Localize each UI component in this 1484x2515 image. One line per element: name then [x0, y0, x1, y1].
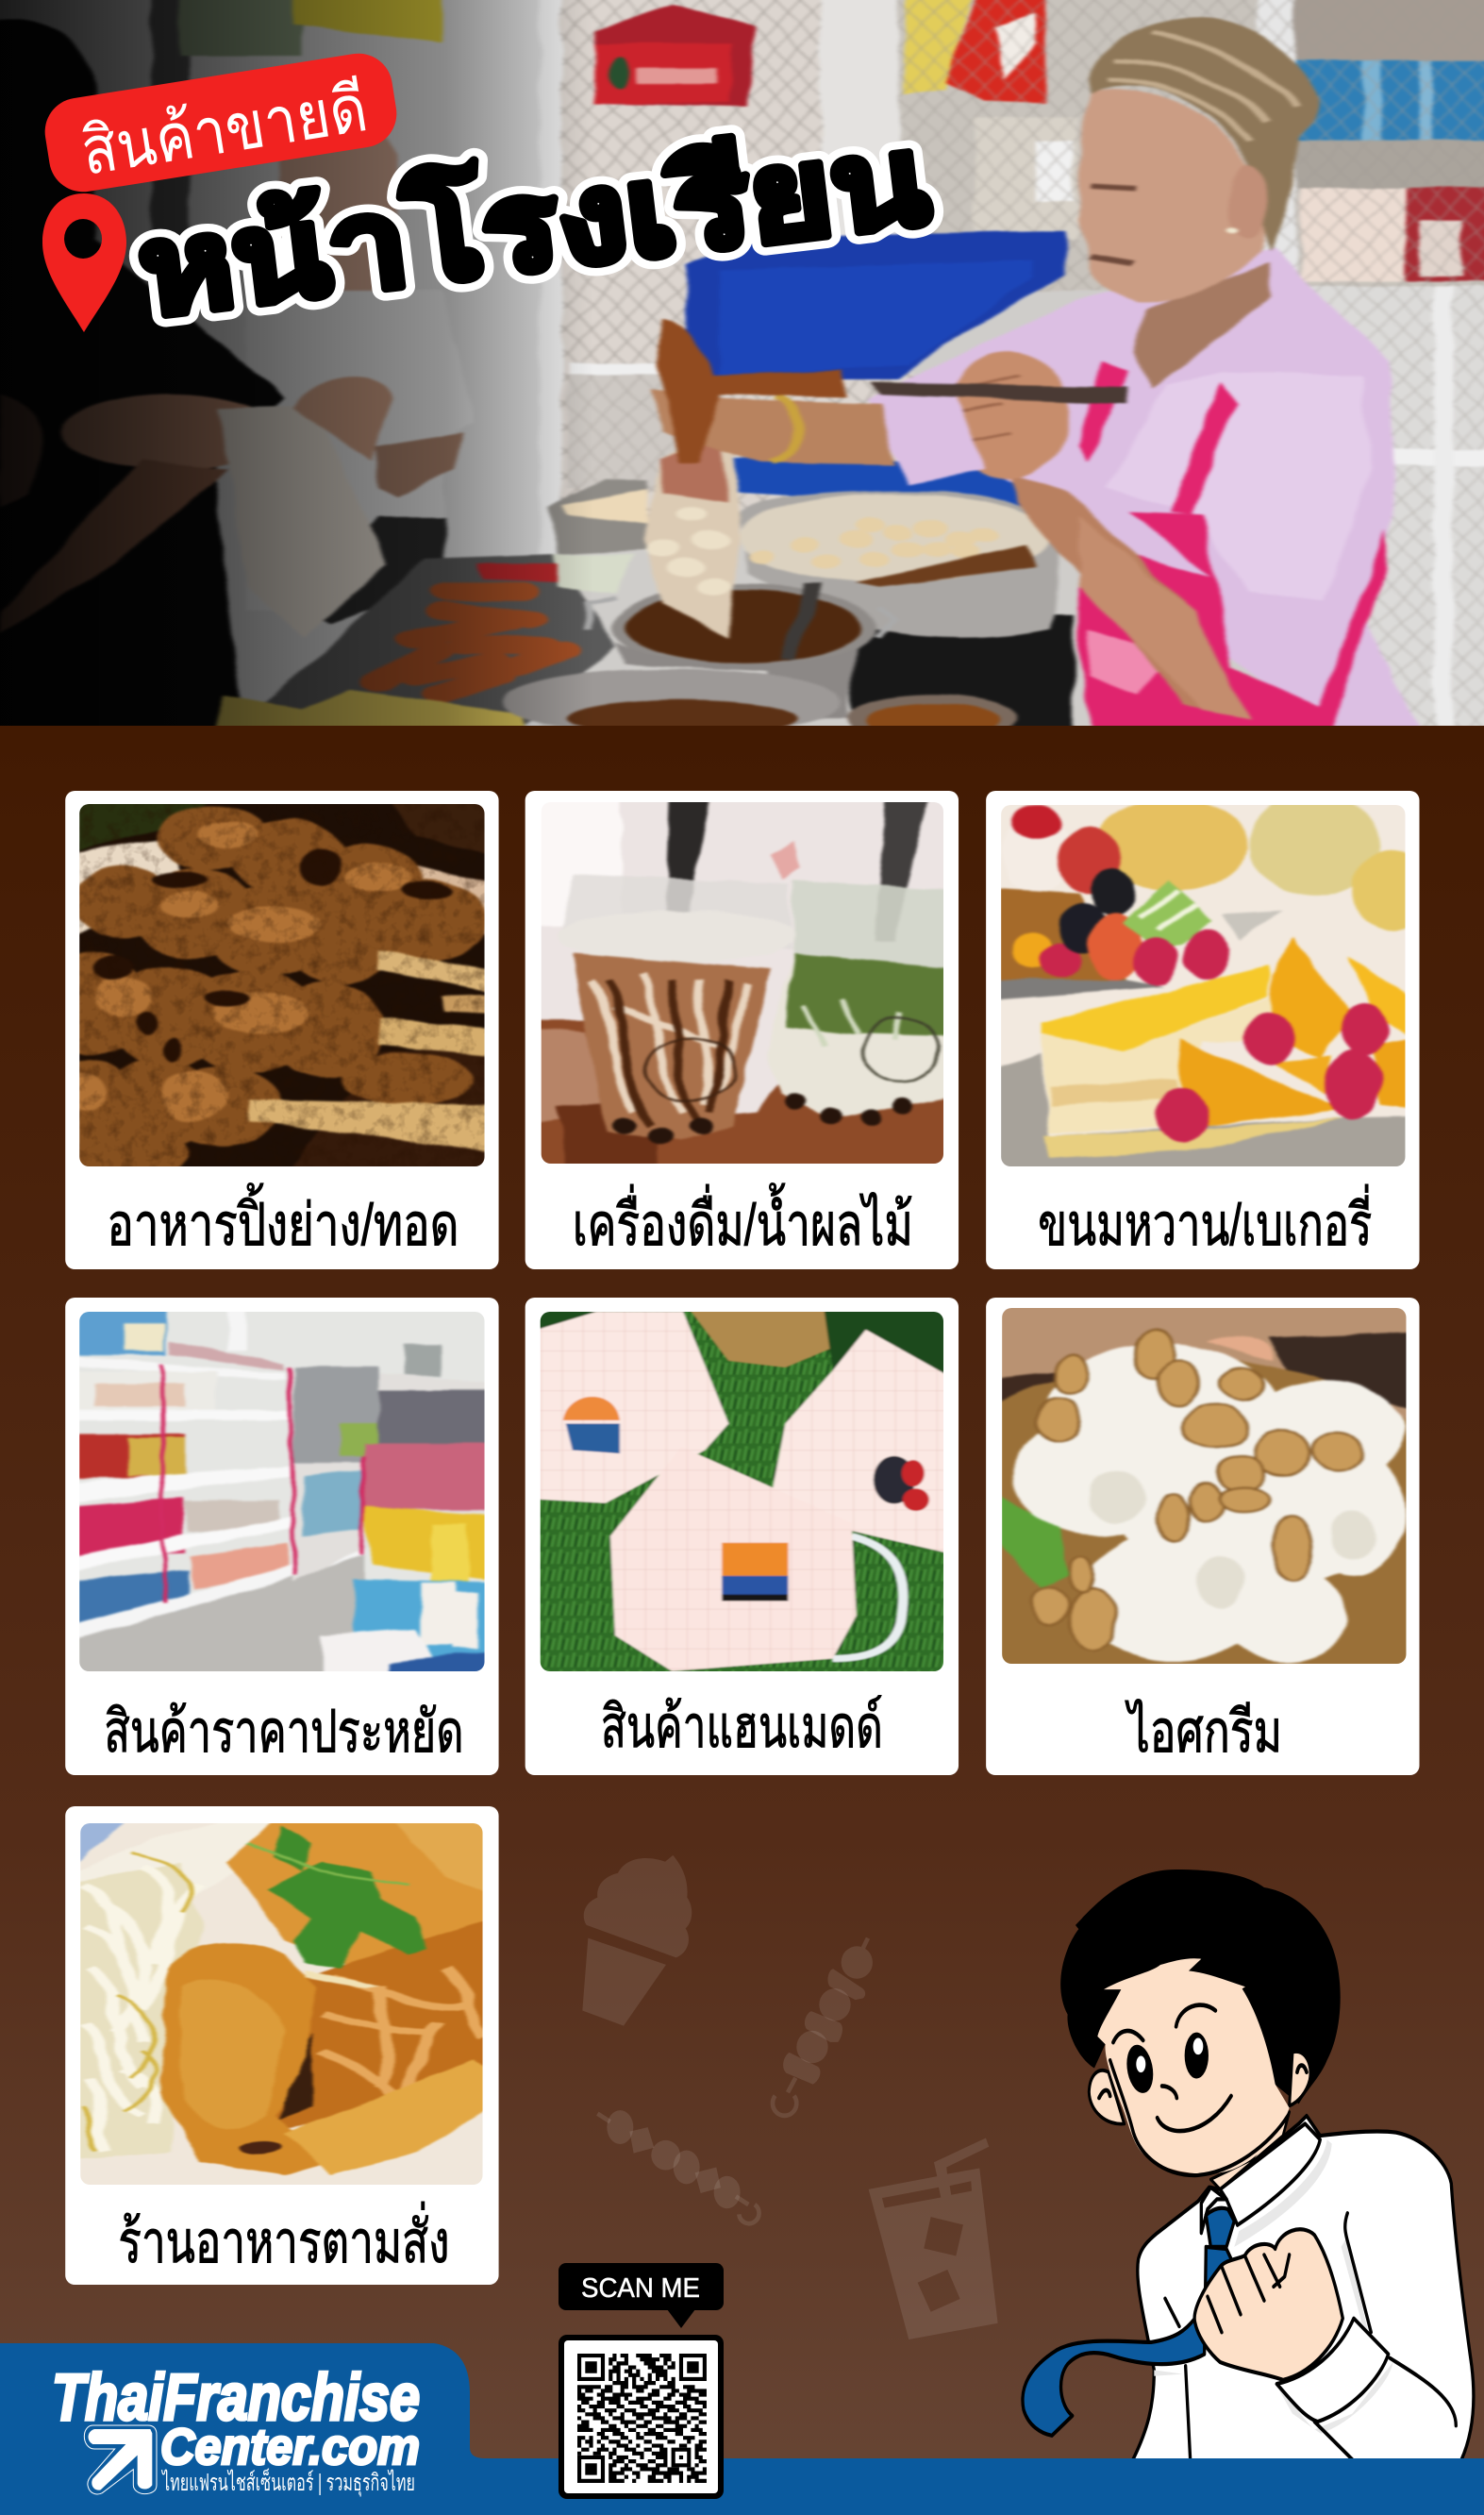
card: drinks — [511, 781, 975, 1269]
photo: pad thai — [38, 1807, 522, 2203]
collar right — [1220, 2123, 1320, 2225]
card: budget goods — [65, 1298, 499, 1775]
mascot: businessman tightening tie — [1023, 1869, 1474, 2461]
logo: ThaiFranchise Center.com: ไทยแฟรนไชส์เซ็นเตอร์ | รวมธุรกิจไทย — [161, 2468, 415, 2497]
tie knot — [1206, 2208, 1234, 2247]
card: handmade goods — [511, 1284, 975, 1775]
hero photo: street vendor at school gate — [0, 0, 1484, 751]
logo: ThaiFranchise Center.com: ThaiFranchise — [52, 2360, 420, 2434]
photo: bubble tea cups — [542, 802, 943, 1164]
collar left — [1201, 2188, 1226, 2233]
icon: skewer vertical — [773, 1938, 873, 2116]
left ear — [1089, 2071, 1125, 2124]
logo: ThaiFranchise Center.com: Center.com — [160, 2419, 420, 2475]
right eye — [1185, 2033, 1209, 2078]
left eye — [1123, 2041, 1158, 2097]
shirt shadows — [1154, 2139, 1393, 2434]
label: ร้านอาหารตามสั่ง — [118, 2202, 449, 2275]
sausage grill — [213, 553, 633, 726]
icon: skewer diagonal — [597, 2110, 759, 2223]
face — [1097, 1958, 1290, 2173]
background icons group — [582, 1855, 998, 2339]
category cards grid — [38, 781, 1439, 2285]
photo: grilled pork skewers — [79, 804, 485, 1166]
title: หน้าโรงเรียน: หน้าโรงเรียน — [132, 107, 935, 342]
ladle and sauce — [656, 319, 1126, 462]
vendor woman — [648, 18, 1429, 751]
blue tub — [568, 231, 1064, 510]
photo: coconut ice cream with peanuts — [1002, 1308, 1406, 1664]
scan me bubble: SCAN ME — [581, 2273, 700, 2304]
label: ขนมหวาน/เบเกอรี่ — [1038, 1184, 1372, 1258]
location pin icon — [42, 193, 126, 332]
card: desserts and bakery — [975, 781, 1439, 1269]
jaw line — [1110, 2060, 1288, 2175]
card: ice cream — [975, 1284, 1439, 1775]
icon: logo arrow — [84, 2425, 157, 2494]
pots and containers — [502, 478, 1074, 751]
footer band with logo panel — [0, 2343, 1484, 2515]
label: ไอศกรีม — [1125, 1699, 1282, 1765]
photo: discount store shelves — [79, 1312, 485, 1671]
label: เครื่องดื่ม/น้ำผลไม้ — [573, 1182, 913, 1258]
photo: cloth masks — [540, 1312, 943, 1671]
label: อาหารปิ้งย่าง/ทอด — [107, 1182, 459, 1258]
photo: cake with mango — [1001, 805, 1406, 1166]
card: made-to-order restaurant — [38, 1806, 522, 2285]
icon: ice cream cone — [582, 1855, 692, 2026]
QR code — [559, 2335, 724, 2499]
customers at left — [0, 18, 473, 751]
finger lines — [1208, 2255, 1290, 2332]
cuff — [1276, 2319, 1389, 2422]
hair — [1060, 1869, 1341, 2104]
scan me bubble — [559, 2263, 724, 2328]
right ear — [1290, 2052, 1310, 2105]
brows, nose, mouth — [1099, 2005, 1307, 2131]
neck — [1210, 2112, 1290, 2189]
red mailbox — [596, 5, 752, 107]
label: สินค้าแฮนเมดด์ — [601, 1695, 883, 1760]
logo: ThaiFranchise Center.com — [52, 2360, 420, 2497]
mask logos — [563, 1397, 929, 1601]
label: สินค้าราคาประหยัด — [104, 1700, 463, 1765]
shirt fold lines — [1165, 2213, 1456, 2459]
card: grilled food — [65, 791, 499, 1269]
page background — [0, 726, 1484, 2515]
fist — [1194, 2229, 1342, 2380]
shirt — [1132, 2116, 1474, 2461]
tie — [1023, 2247, 1231, 2436]
icon: iced drink — [869, 2138, 998, 2339]
title: หน้าโรงเรียน: หน้าโรงเรียน — [132, 107, 935, 342]
red pill badge: สินค้าขายดี — [76, 71, 372, 189]
plastic bag with meatballs — [643, 423, 740, 639]
